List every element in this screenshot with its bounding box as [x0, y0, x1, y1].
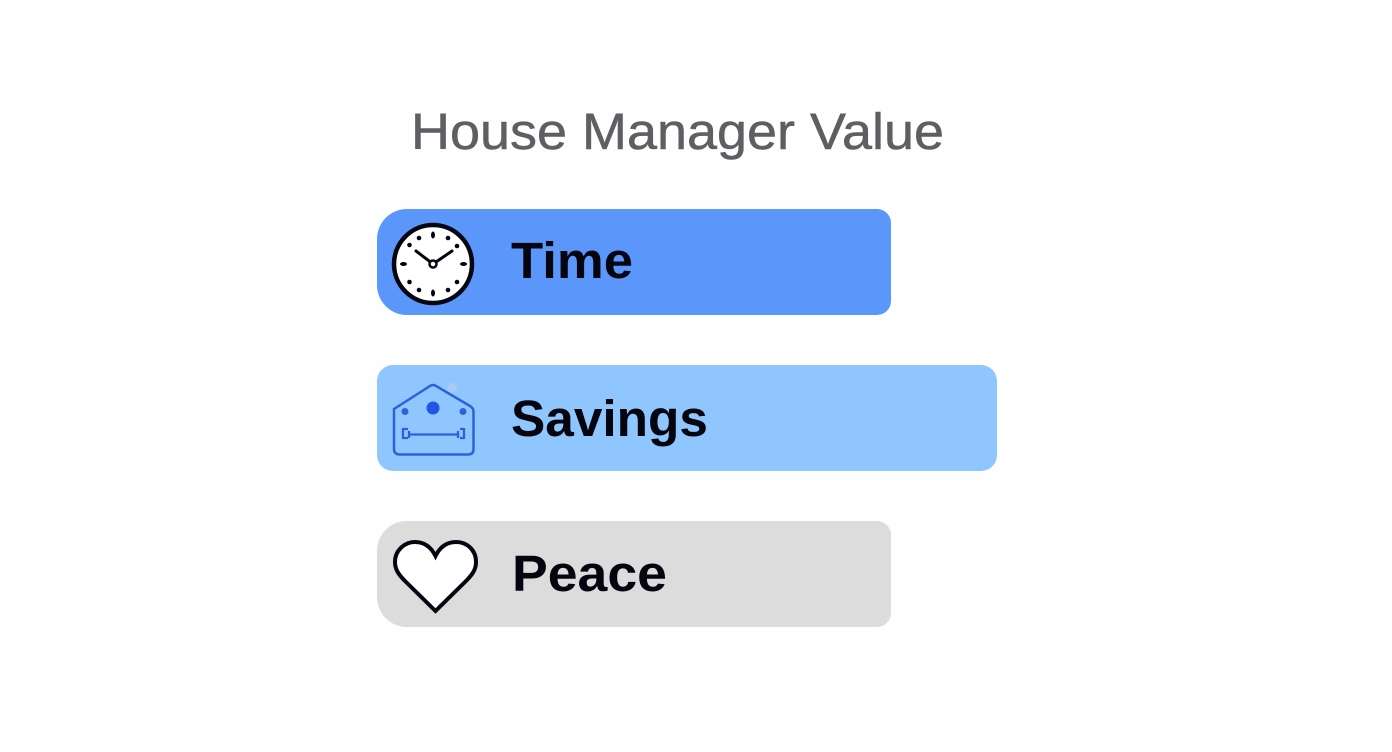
- icon: heart: [395, 542, 476, 611]
- title: House Manager Value: [411, 103, 944, 160]
- savings label: Savings: [511, 390, 708, 447]
- panel: savings: [377, 365, 997, 471]
- icon: house: [394, 383, 474, 454]
- peace label: Peace: [512, 545, 667, 602]
- panel: time: [377, 209, 891, 315]
- time bar: [377, 209, 891, 315]
- savings bar: [377, 365, 997, 471]
- icon: clock: [394, 225, 472, 303]
- peace bar: [377, 521, 891, 627]
- panel: peace: [377, 521, 891, 627]
- time label: Time: [511, 232, 633, 289]
